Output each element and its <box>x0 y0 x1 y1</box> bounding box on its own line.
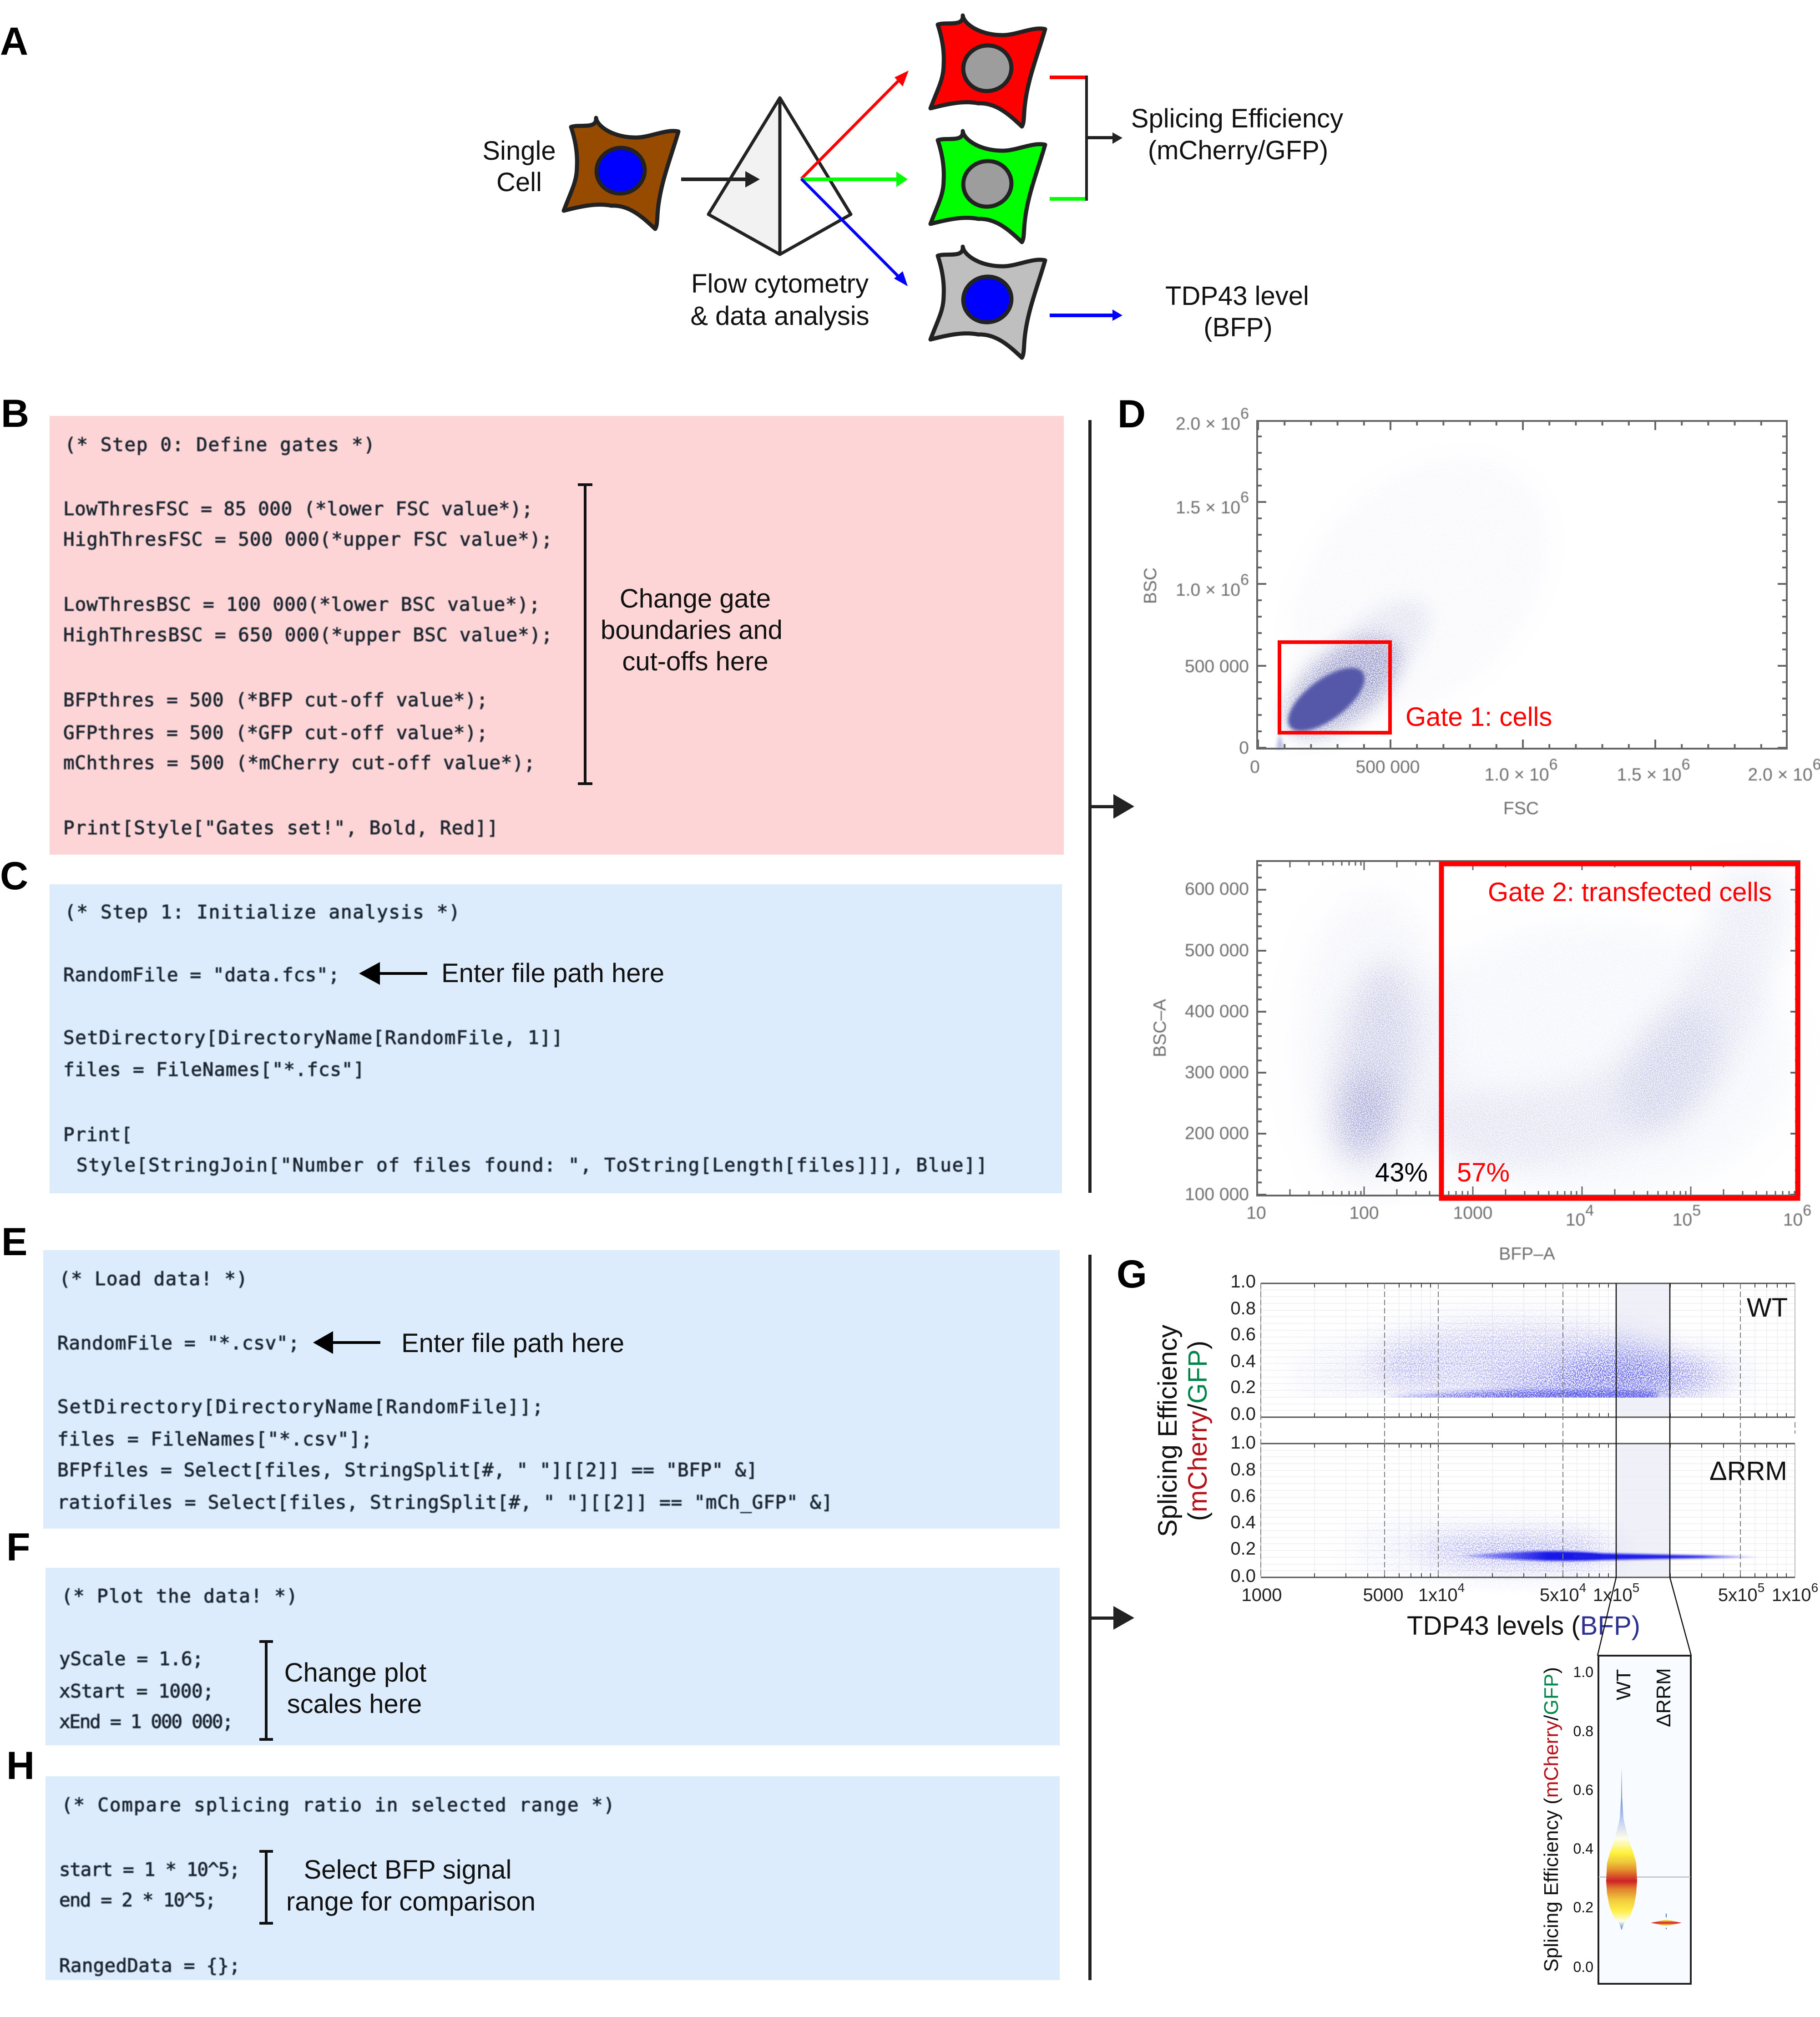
scatter cloud <box>1239 407 1600 767</box>
axis tick labels: 6 <box>1240 405 1249 422</box>
text: Single Cell: Single <box>482 136 556 166</box>
violin WT <box>1606 1768 1637 1930</box>
panel background <box>50 884 1062 1193</box>
icon: blue nucleus cell <box>930 247 1045 358</box>
scatter cloud <box>1297 892 1793 1201</box>
panel label A: A <box>0 20 28 63</box>
note: enter file path: Enter file path here <box>441 958 664 988</box>
mean line <box>1599 1876 1690 1878</box>
axis tick labels: 500 000 <box>1356 757 1420 777</box>
tick marks <box>1257 421 1787 749</box>
bracket: combine red and green <box>1050 76 1122 201</box>
text: Single Cell: Cell <box>496 167 542 197</box>
x axis tick labels: 5x10 <box>1540 1585 1579 1605</box>
code block: Print[ <box>63 1124 132 1145</box>
x axis tick labels: 4 <box>1458 1581 1465 1595</box>
axis tick labels <box>1141 405 1820 818</box>
axis tick labels: 6 <box>1240 571 1249 588</box>
code block: SetDirectory[DirectoryName[RandomFile]]; <box>57 1396 543 1418</box>
x axis tick labels: 1x10 <box>1772 1585 1811 1605</box>
panel G: splicing efficiency scatter plots <box>1153 1272 1818 1656</box>
code block: yScale = 1.6; <box>59 1648 203 1670</box>
panel G: violin comparison inset <box>1540 1656 1691 1984</box>
axis tick labels: 5 <box>1692 1202 1701 1219</box>
axis tick labels: 6 <box>1240 489 1249 506</box>
axis tick labels: 400 000 <box>1185 1002 1249 1021</box>
code block: (* Compare splicing ratio in selected range *) <box>61 1794 615 1816</box>
y axis tick labels: 0.2 <box>1230 1539 1256 1559</box>
code block <box>59 1585 298 1733</box>
axis tick labels: 2.0 × 10 <box>1748 765 1813 785</box>
frame tick marks <box>1314 1283 1786 1577</box>
x axis tick labels: 5 <box>1758 1581 1764 1595</box>
y axis tick labels: 0.8 <box>1230 1460 1256 1480</box>
axis tick labels: 1.0 × 10 <box>1485 765 1549 785</box>
panel C: initialize analysis <box>50 884 1062 1193</box>
y axis title <box>1153 1325 1213 1537</box>
panel E: load data <box>43 1250 1060 1529</box>
y axis tick labels: 0.4 <box>1230 1512 1256 1532</box>
arrow: enter file path <box>359 962 427 985</box>
axis tick labels: 2.0 × 10 <box>1176 414 1240 434</box>
note: select BFP range: Select BFP signal <box>304 1855 511 1885</box>
y axis tick labels: 0.0 <box>1230 1566 1256 1586</box>
x axis tick labels: 6 <box>1811 1581 1818 1595</box>
code block: ratiofiles = Select[files, StringSplit[#, " "][[2]] == "mCh_GFP" &] <box>57 1491 833 1513</box>
y axis tick labels <box>1230 1272 1256 1586</box>
panel label C: C <box>0 854 28 898</box>
panel label H: H <box>6 1744 35 1788</box>
panel background <box>50 416 1064 855</box>
axis tick labels: 500 000 <box>1185 941 1249 960</box>
x axis tick labels: 1x10 <box>1593 1585 1633 1605</box>
WT label: WT <box>1747 1293 1788 1323</box>
code block <box>59 1794 615 1976</box>
code block: HighThresBSC = 650 000(*upper BSC value*); <box>63 624 552 646</box>
selected range lines <box>1616 1283 1670 1577</box>
text: TDP43 level: (BFP) <box>1203 313 1273 342</box>
icon: green cell <box>930 131 1045 242</box>
code block: RangedData = {}; <box>59 1955 240 1976</box>
axis tick labels: 100 000 <box>1185 1185 1249 1204</box>
flow line and arrow B/C to D <box>1088 420 1134 1193</box>
axis tick labels: 0 <box>1239 738 1249 758</box>
code block <box>63 901 987 1176</box>
x axis tick labels <box>1242 1581 1818 1605</box>
code block: Print[Style["Gates set!", Bold, Red]] <box>63 817 498 839</box>
code block: xEnd = 1 000 000; <box>59 1711 233 1733</box>
y axis tick labels: 1.0 <box>1230 1433 1256 1453</box>
inset frame <box>1598 1656 1691 1984</box>
note: change plot scales: Change plot <box>284 1658 426 1688</box>
code block: LowThresFSC = 85 000 (*lower FSC value*); <box>63 498 533 520</box>
icon: red cell <box>930 15 1045 127</box>
y axis tick labels: 0.6 <box>1573 1782 1593 1798</box>
panel label E: E <box>1 1220 27 1264</box>
zoom connector lines <box>1598 1577 1691 1656</box>
axis tick labels: 100 <box>1349 1203 1379 1223</box>
code block: BFPfiles = Select[files, StringSplit[#, " "][[2]] == "BFP" &] <box>57 1459 758 1481</box>
axis tick labels <box>1150 879 1811 1264</box>
y axis tick labels: 0.4 <box>1230 1351 1256 1371</box>
dRRM label: ΔRRM <box>1709 1456 1787 1486</box>
panel background <box>46 1776 1060 1980</box>
x axis tick labels: 1000 <box>1242 1585 1282 1605</box>
gate 1 rectangle <box>1279 642 1390 733</box>
arrow: green channel <box>801 172 908 187</box>
dRRM dense band <box>1461 1551 1761 1561</box>
axis tick labels: 10 <box>1673 1210 1692 1230</box>
y axis tick labels: 0.2 <box>1230 1377 1256 1397</box>
code block: HighThresFSC = 500 000(*upper FSC value*); <box>63 528 552 550</box>
WT baseline band <box>1392 1390 1656 1399</box>
code block: SetDirectory[DirectoryName[RandomFile, 1]] <box>63 1027 563 1049</box>
arrow: red channel <box>801 71 909 179</box>
axis tick labels: 6 <box>1803 1202 1811 1219</box>
arrow: enter file path <box>313 1331 380 1354</box>
y axis tick labels: 0.8 <box>1573 1723 1593 1739</box>
y axis tick labels: 1.0 <box>1230 1272 1256 1292</box>
axis tick labels: 6 <box>1682 756 1690 773</box>
x axis tick labels: 1x10 <box>1418 1585 1458 1605</box>
y axis title: (mCherry/GFP) <box>1183 1341 1213 1521</box>
code block: (* Step 1: Initialize analysis *) <box>65 901 460 923</box>
text: Splicing Efficiency: (mCherry/GFP) <box>1148 136 1328 165</box>
y axis title: Splicing Efficiency <box>1153 1325 1183 1537</box>
text: Flow cytometry and data analysis: Flow cytometry <box>691 269 869 299</box>
axis tick labels: 200 000 <box>1185 1124 1249 1143</box>
bracket <box>578 485 592 784</box>
panel D: FSC BSC scatter plot <box>1141 405 1820 818</box>
axis tick labels: 1.5 × 10 <box>1617 765 1682 785</box>
note: enter file path: Enter file path here <box>401 1328 624 1358</box>
note: change gate boundaries: Change gate <box>620 584 771 613</box>
panel background <box>43 1250 1060 1529</box>
percentage untransfected: 43% <box>1375 1158 1428 1187</box>
panel A: flow cytometry schematic <box>482 15 1343 358</box>
x axis title: TDP43 levels (BFP) <box>1407 1611 1640 1641</box>
y axis tick labels: 0.6 <box>1230 1486 1256 1506</box>
frames <box>1261 1283 1795 1577</box>
y axis tick labels: 0.0 <box>1573 1959 1593 1975</box>
shaded comparison range <box>1616 1283 1670 1577</box>
plot grid <box>1260 1283 1795 1577</box>
percentage transfected: 57% <box>1457 1158 1510 1187</box>
bracket <box>259 1642 273 1739</box>
code block: RandomFile = "data.fcs"; <box>63 964 339 986</box>
y axis tick labels: 0.4 <box>1573 1840 1593 1857</box>
code block: xStart = 1000; <box>59 1680 214 1702</box>
code block: start = 1 * 10^5; <box>59 1859 240 1880</box>
panel label D: D <box>1117 392 1146 436</box>
axis tick labels: 10 <box>1246 1203 1266 1223</box>
y axis tick labels: 1.0 <box>1573 1664 1593 1680</box>
panel D: BFP BSC scatter plot <box>1150 861 1811 1264</box>
WT label: WT <box>1613 1669 1635 1700</box>
axis tick labels: 10 <box>1783 1210 1803 1230</box>
dense cell population <box>1276 656 1375 749</box>
code block <box>57 1268 833 1513</box>
text: Splicing Efficiency: Splicing Efficiency <box>1131 104 1343 133</box>
code block: files = FileNames["*.fcs"] <box>63 1059 364 1080</box>
axis tick labels: 300 000 <box>1185 1063 1249 1082</box>
code block: files = FileNames["*.csv"]; <box>57 1428 372 1450</box>
axis tick labels: 4 <box>1585 1202 1594 1219</box>
tick marks <box>1259 861 1797 1196</box>
axis tick labels: 0 <box>1250 757 1260 777</box>
x axis tick labels: 5x10 <box>1718 1585 1758 1605</box>
gate 2 label: Gate 2: transfected cells <box>1488 877 1772 907</box>
axis tick labels: BFP–A <box>1499 1244 1555 1264</box>
panel background <box>46 1568 1060 1745</box>
y axis title: Splicing Efficiency (mCherry/GFP) <box>1540 1667 1562 1972</box>
note: change gate boundaries: boundaries and <box>601 615 783 645</box>
bracket <box>259 1851 273 1923</box>
code block: mChthres = 500 (*mCherry cut-off value*); <box>63 752 535 774</box>
axis tick labels: 1000 <box>1453 1203 1492 1223</box>
text: TDP43 level: TDP43 level <box>1165 281 1309 311</box>
y axis tick labels: 0.2 <box>1573 1899 1593 1916</box>
axis tick labels: 10 <box>1566 1210 1585 1230</box>
code block: Style[StringJoin["Number of files found: ", ToString[Length[files]]], Blue]] <box>76 1154 987 1176</box>
dRRM scatter <box>1356 1529 1615 1566</box>
violin dRRM <box>1651 1914 1682 1929</box>
code block: (* Step 0: Define gates *) <box>65 434 375 456</box>
code block: BFPthres = 500 (*BFP cut-off value*); <box>63 689 488 711</box>
panel label G: G <box>1117 1252 1147 1296</box>
icon: flow cytometer prism <box>708 98 851 254</box>
y axis tick labels: 0.8 <box>1230 1298 1256 1318</box>
panel label B: B <box>1 392 29 436</box>
arrow: blue channel <box>801 179 908 286</box>
y axis tick labels <box>1573 1664 1593 1975</box>
x axis tick labels: 4 <box>1579 1581 1586 1595</box>
axis tick labels: BSC–A <box>1150 999 1170 1057</box>
axis tick labels: 1.5 × 10 <box>1176 498 1240 517</box>
code block <box>63 434 552 839</box>
x axis tick labels: 5 <box>1633 1581 1639 1595</box>
panel F: plot the data <box>46 1568 1060 1745</box>
code block: LowThresBSC = 100 000(*lower BSC value*); <box>63 593 540 615</box>
note: select BFP range: range for comparison <box>286 1887 536 1916</box>
axis tick labels: 500 000 <box>1185 657 1249 676</box>
gate 1 label: Gate 1: cells <box>1405 702 1552 732</box>
panel label F: F <box>6 1525 30 1569</box>
y axis tick labels: 0.6 <box>1230 1324 1256 1344</box>
axis tick labels: 1.0 × 10 <box>1176 580 1240 600</box>
WT scatter <box>1297 1324 1747 1402</box>
axis tick labels: BSC <box>1141 568 1160 604</box>
arrow: blue output <box>1050 309 1122 321</box>
note: change plot scales: scales here <box>287 1689 422 1719</box>
axes frame <box>1257 421 1787 749</box>
axis tick labels: FSC <box>1503 799 1539 818</box>
icon: input cell <box>564 118 678 229</box>
axes frame <box>1257 861 1800 1196</box>
panel H: compare splicing ratio <box>46 1776 1060 1980</box>
code block: RandomFile = "*.csv"; <box>57 1332 299 1354</box>
axis tick labels: 6 <box>1549 756 1557 773</box>
code block: end = 2 * 10^5; <box>59 1889 216 1911</box>
code block: GFPthres = 500 (*GFP cut-off value*); <box>63 722 488 744</box>
axis tick labels: 600 000 <box>1185 879 1249 899</box>
code block: (* Load data! *) <box>59 1268 248 1290</box>
dashed reference lines <box>1261 1283 1795 1577</box>
flow line and arrow E/F/H to G <box>1088 1255 1134 1980</box>
dRRM label: ΔRRM <box>1653 1668 1675 1727</box>
arrow: cell to cytometer <box>681 171 760 188</box>
panel B: define gates <box>50 416 1064 855</box>
text: Flow cytometry and data analysis: & data analysis <box>690 301 870 331</box>
code block: (* Plot the data! *) <box>61 1585 298 1607</box>
y axis tick labels: 0.0 <box>1230 1404 1256 1424</box>
note: change gate boundaries: cut-offs here <box>622 647 768 676</box>
x axis tick labels: 5000 <box>1363 1585 1403 1605</box>
gate 2 rectangle <box>1441 864 1798 1198</box>
